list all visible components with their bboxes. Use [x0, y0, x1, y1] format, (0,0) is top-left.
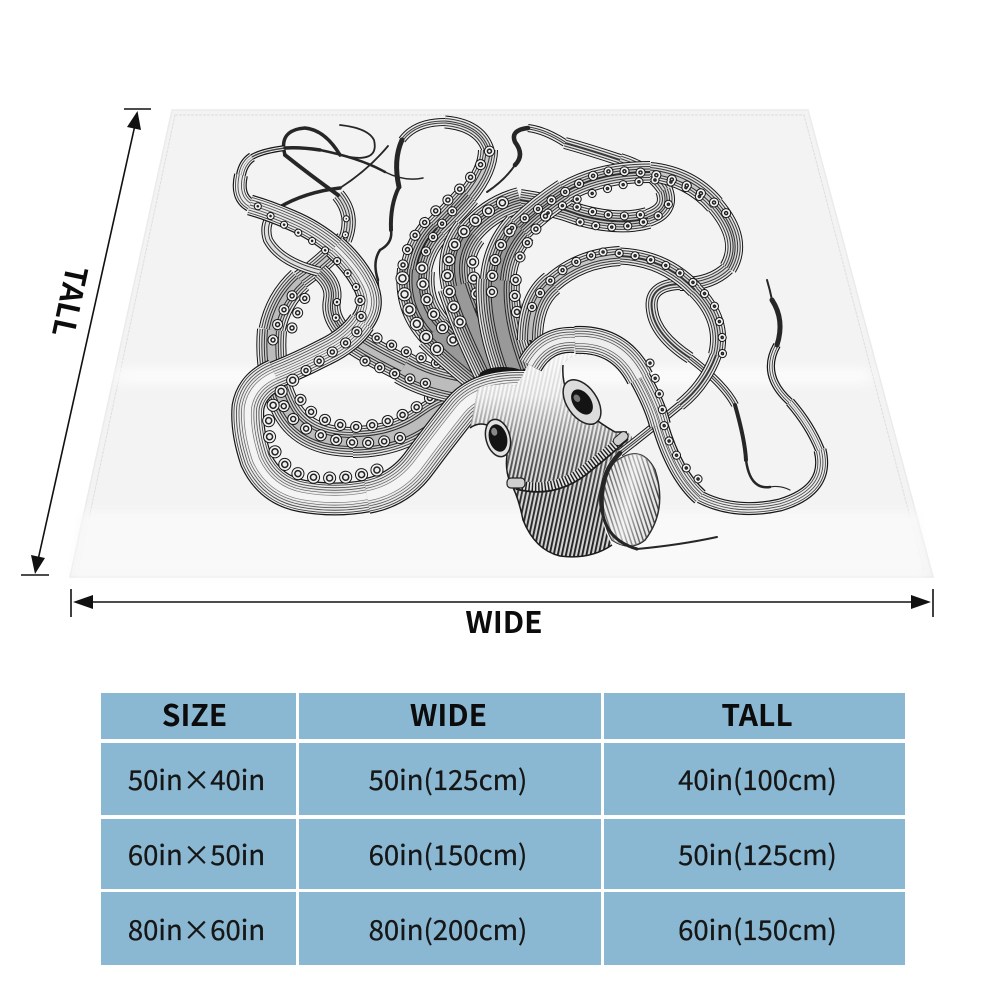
octopus head and body	[470, 327, 632, 557]
table row: 60 by 50	[101, 819, 905, 889]
tentacle: arm over the eye to lower right	[530, 280, 822, 509]
hatched base where the upper arms fan out	[440, 300, 535, 386]
table header row: SIZE	[162, 691, 227, 735]
collar fold	[507, 430, 630, 492]
table row: 50 by 40: 50in(125cm)	[369, 758, 527, 798]
table row: 50 by 40: 40in(100cm)	[678, 758, 837, 798]
blanket	[70, 110, 933, 577]
table row: 80 by 60: 60in(150cm)	[678, 908, 837, 948]
wide label: WIDE	[465, 598, 543, 642]
octopus mantle bulb	[603, 454, 660, 546]
octopus illustration	[240, 122, 822, 557]
tentacle: rear left arm	[271, 125, 500, 443]
tentacle: long arm to the far right	[492, 171, 790, 490]
tall label: TALL	[43, 263, 101, 341]
tall dimension arrow	[21, 109, 151, 575]
table row: 80 by 60	[101, 892, 905, 965]
dark shadow where the arms meet the head	[479, 367, 527, 385]
table row: 80 by 60: 80in×60in	[128, 908, 265, 948]
left eye	[481, 417, 515, 459]
right eye	[555, 373, 609, 431]
tentacle: upper arm curling right	[448, 128, 669, 375]
tentacle: tall centre arm	[375, 122, 493, 378]
table header row: TALL	[721, 691, 793, 735]
table row: 50 by 40: 50in×40in	[128, 758, 265, 798]
table row: 60 by 50: 60in(150cm)	[369, 833, 527, 873]
size table	[101, 691, 905, 965]
wide dimension arrow	[71, 589, 933, 617]
tentacle: large front arm	[240, 148, 530, 499]
table row: 80 by 60: 80in(200cm)	[369, 908, 527, 948]
table header row	[101, 691, 905, 739]
table row: 60 by 50: 50in(125cm)	[678, 833, 837, 873]
table header row: WIDE	[410, 691, 487, 735]
tentacle: middle left arm	[266, 146, 505, 392]
tentacle: arm wrapping around the bulb	[530, 252, 723, 549]
table row: 50 by 40	[101, 743, 905, 815]
table row: 60 by 50: 60in×50in	[128, 833, 265, 873]
